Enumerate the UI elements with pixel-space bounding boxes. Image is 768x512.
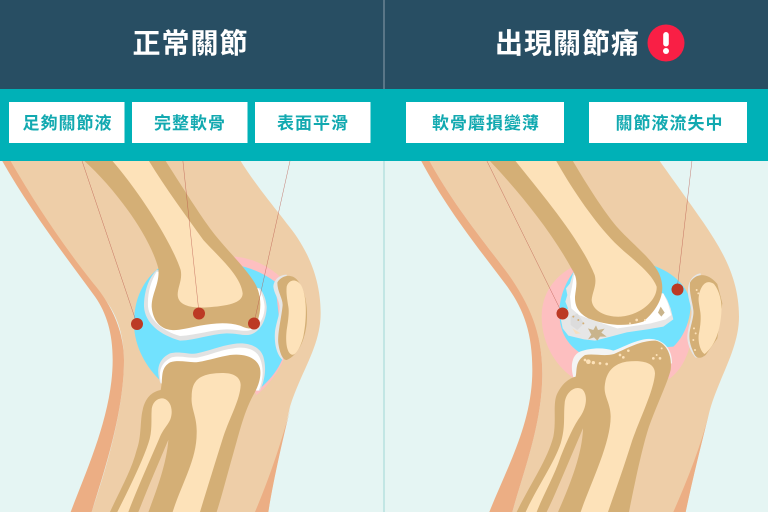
label: worn cartilage: 軟骨磨損變薄 <box>432 113 540 133</box>
leader lines <box>76 143 694 324</box>
fibula marrow <box>117 398 172 512</box>
femur cartilage <box>144 270 267 341</box>
thigh and calf skin <box>8 160 321 512</box>
label: enough synovial fluid: 足夠關節液 <box>22 113 112 133</box>
marker dots <box>131 284 684 330</box>
back fat layer <box>255 403 292 512</box>
icon: alert <box>648 24 684 62</box>
femur bone <box>83 160 260 330</box>
fibula gap <box>547 428 583 512</box>
patella cartilage <box>687 273 704 358</box>
label: intact cartilage <box>132 102 248 143</box>
tibia cartilage <box>158 343 265 391</box>
swollen joint capsule <box>542 266 692 379</box>
label: fluid loss: 關節液流失中 <box>616 113 724 133</box>
tibia and fibula bone <box>110 355 260 512</box>
cartilage wear patches <box>571 307 665 341</box>
bone wear speckles <box>584 319 663 365</box>
fibula gap <box>139 440 168 512</box>
panel divider <box>384 0 385 512</box>
illustration: painful knee joint <box>421 160 739 512</box>
thigh and calf skin <box>429 160 739 512</box>
tibia and fibula bone <box>517 341 671 512</box>
teal label band <box>0 89 768 161</box>
patella marrow <box>286 281 306 355</box>
patella bone <box>277 276 307 360</box>
fibula marrow <box>526 388 586 512</box>
reduced synovial fluid <box>559 263 691 353</box>
label: smooth surface <box>255 102 370 143</box>
label: enough synovial fluid <box>9 102 124 143</box>
outer fat layer <box>421 160 542 512</box>
title: normal joint: 正常關節 <box>132 28 249 59</box>
header bar <box>0 0 768 89</box>
patella speckles <box>692 289 699 351</box>
femur marrow <box>112 160 243 307</box>
back fat layer <box>673 413 709 512</box>
label: worn cartilage <box>406 102 564 143</box>
label: fluid loss <box>589 102 747 143</box>
tibia marrow <box>581 361 655 512</box>
outer fat layer <box>2 160 124 512</box>
worn tibia cartilage <box>572 339 672 377</box>
label: smooth surface: 表面平滑 <box>277 114 349 133</box>
worn femur cartilage <box>561 273 673 341</box>
joint capsule <box>233 257 285 395</box>
title: joint pain: 出現關節痛 <box>495 28 640 59</box>
patella cartilage <box>273 275 287 360</box>
synovial fluid <box>134 265 283 390</box>
femur bone <box>489 160 662 325</box>
femur marrow <box>515 160 657 317</box>
patella bone <box>689 275 722 358</box>
patella marrow <box>699 282 722 354</box>
illustration: normal knee joint <box>2 160 321 512</box>
tibia marrow <box>173 373 241 512</box>
label: intact cartilage: 完整軟骨 <box>154 113 226 133</box>
